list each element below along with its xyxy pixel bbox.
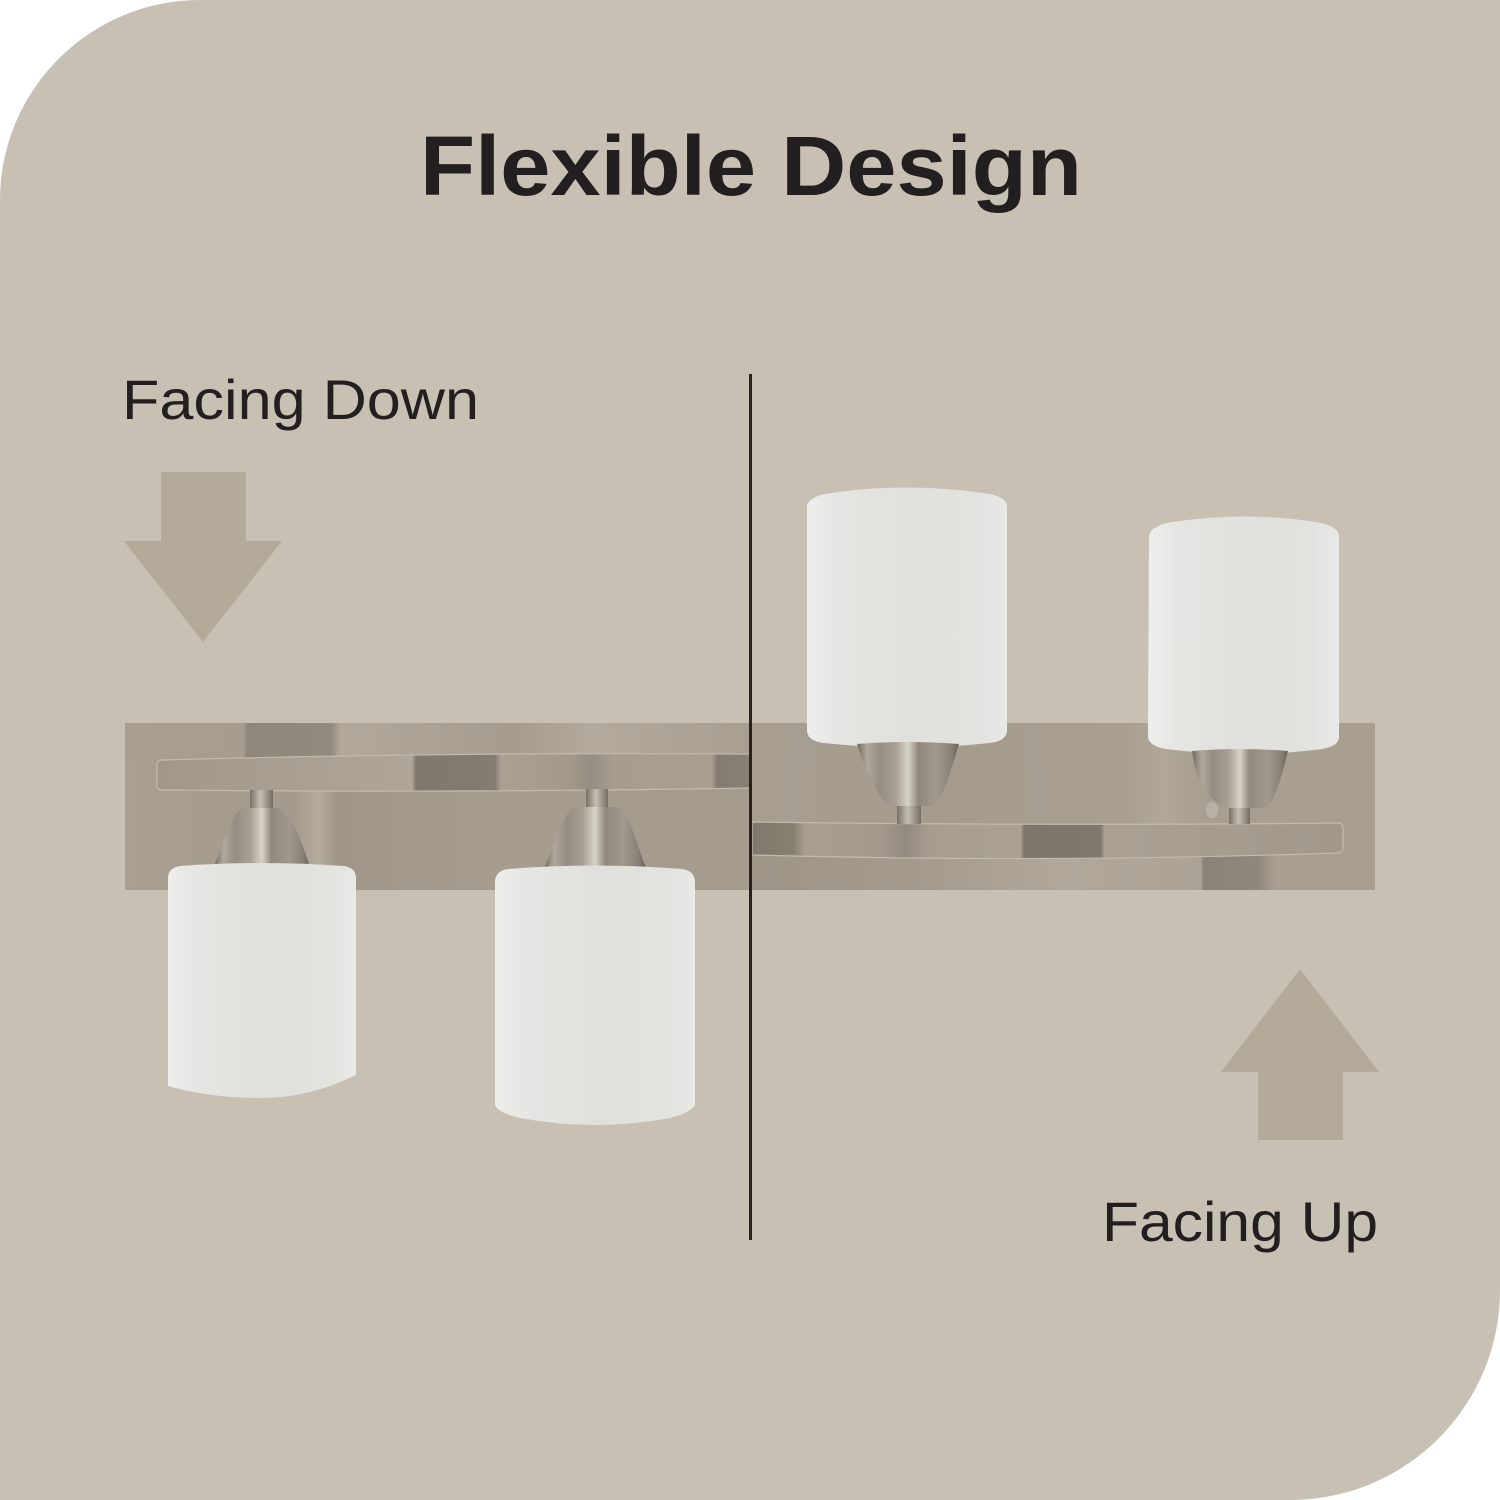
cone 1	[857, 742, 959, 806]
mount knob	[1206, 802, 1218, 818]
back plate	[752, 723, 1375, 890]
label: facing up: Facing Up	[1102, 1190, 1378, 1253]
back plate	[125, 723, 750, 890]
title: Flexible Design	[420, 119, 1082, 213]
fixture: facing down	[125, 723, 750, 1125]
label: facing down: Facing Down	[122, 368, 479, 431]
cone 2	[1192, 749, 1288, 808]
stem 2	[586, 789, 608, 809]
curved rail	[157, 754, 750, 791]
cone 2	[544, 807, 646, 870]
glass shade 2	[495, 866, 695, 1125]
fixture: facing up	[752, 488, 1375, 890]
cone 1	[214, 808, 310, 868]
divider line	[749, 374, 752, 1240]
stem 1	[250, 790, 273, 810]
glass shade 1	[807, 488, 1007, 748]
mount screw	[278, 795, 294, 811]
stem 1	[897, 805, 921, 824]
glass shade 1	[168, 863, 356, 1098]
glass shade 2	[1148, 516, 1339, 754]
arrow: up	[1221, 969, 1379, 1140]
stem 2	[1229, 806, 1250, 824]
arrow: down	[124, 472, 282, 642]
curved rail	[752, 822, 1343, 859]
